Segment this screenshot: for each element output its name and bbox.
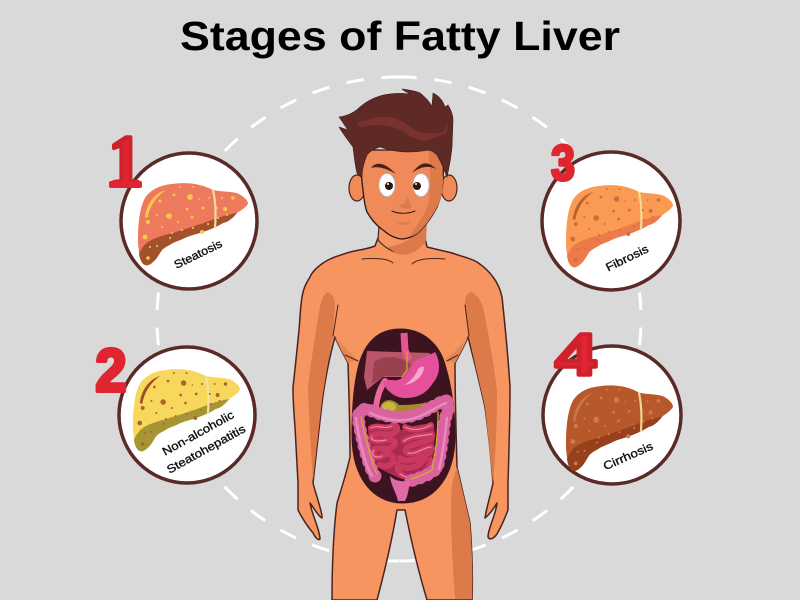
ears	[349, 175, 457, 201]
panel: stage 1 steatosis	[121, 153, 257, 289]
icon: liver steatohepatitis	[133, 369, 240, 451]
hair highlight	[357, 117, 448, 140]
liver organ shade	[372, 357, 411, 384]
icon: liver cirrhosis	[566, 385, 673, 471]
large intestine	[356, 400, 448, 481]
mouth	[392, 211, 415, 213]
body contour lines	[333, 258, 469, 361]
panel: stage 3 fibrosis	[542, 152, 680, 290]
dashed ring	[157, 77, 641, 561]
face shadow	[409, 150, 443, 237]
body	[293, 238, 510, 600]
eyes	[379, 174, 429, 196]
title: Stages of Fatty Liver	[180, 13, 620, 59]
number 2: 2	[96, 337, 126, 404]
number 3: 3	[551, 135, 575, 191]
small intestine	[371, 425, 432, 478]
panel: stage 2 non-alcoholic steatohepatitis	[119, 347, 255, 483]
duodenum	[376, 381, 385, 407]
nose	[399, 196, 411, 209]
label: Non-alcoholic Steatohepatitis: Non-alcoholic	[161, 409, 237, 459]
stomach	[383, 352, 439, 398]
armpit shadows	[335, 337, 468, 363]
icon: liver fibrosis	[566, 185, 673, 267]
label: Steatosis: Steatosis	[172, 238, 225, 272]
pancreas	[380, 400, 428, 416]
rectum	[390, 476, 410, 501]
esophagus	[404, 333, 409, 360]
stomach highlight	[404, 367, 424, 385]
label: Non-alcoholic Steatohepatitis: Steatohepatitis	[165, 423, 248, 476]
label: Fibrosis: Fibrosis	[604, 243, 651, 274]
label: Non-alcoholic Steatohepatitis	[161, 409, 248, 476]
liver organ	[364, 351, 431, 390]
arm shadow right	[465, 292, 497, 483]
leg shadow	[451, 467, 472, 599]
hair	[339, 89, 453, 177]
small intestine base	[368, 424, 435, 479]
colon vessels	[361, 412, 438, 479]
bile duct	[402, 352, 407, 377]
neck	[378, 220, 426, 254]
chin shadow	[396, 221, 411, 225]
number 4: 4	[555, 321, 597, 389]
panel: stage 4 cirrhosis	[543, 346, 681, 484]
face	[361, 150, 443, 239]
arm shadow left	[308, 292, 335, 480]
neck shadow	[388, 220, 427, 255]
icon: liver steatosis	[138, 183, 248, 265]
pancreas light	[382, 402, 396, 412]
abdomen cavity	[352, 329, 455, 503]
organs	[356, 333, 448, 501]
label: Cirrhosis: Cirrhosis	[602, 441, 655, 473]
number 1: 1	[108, 121, 142, 201]
person	[293, 89, 510, 600]
eyebrows	[371, 163, 436, 174]
